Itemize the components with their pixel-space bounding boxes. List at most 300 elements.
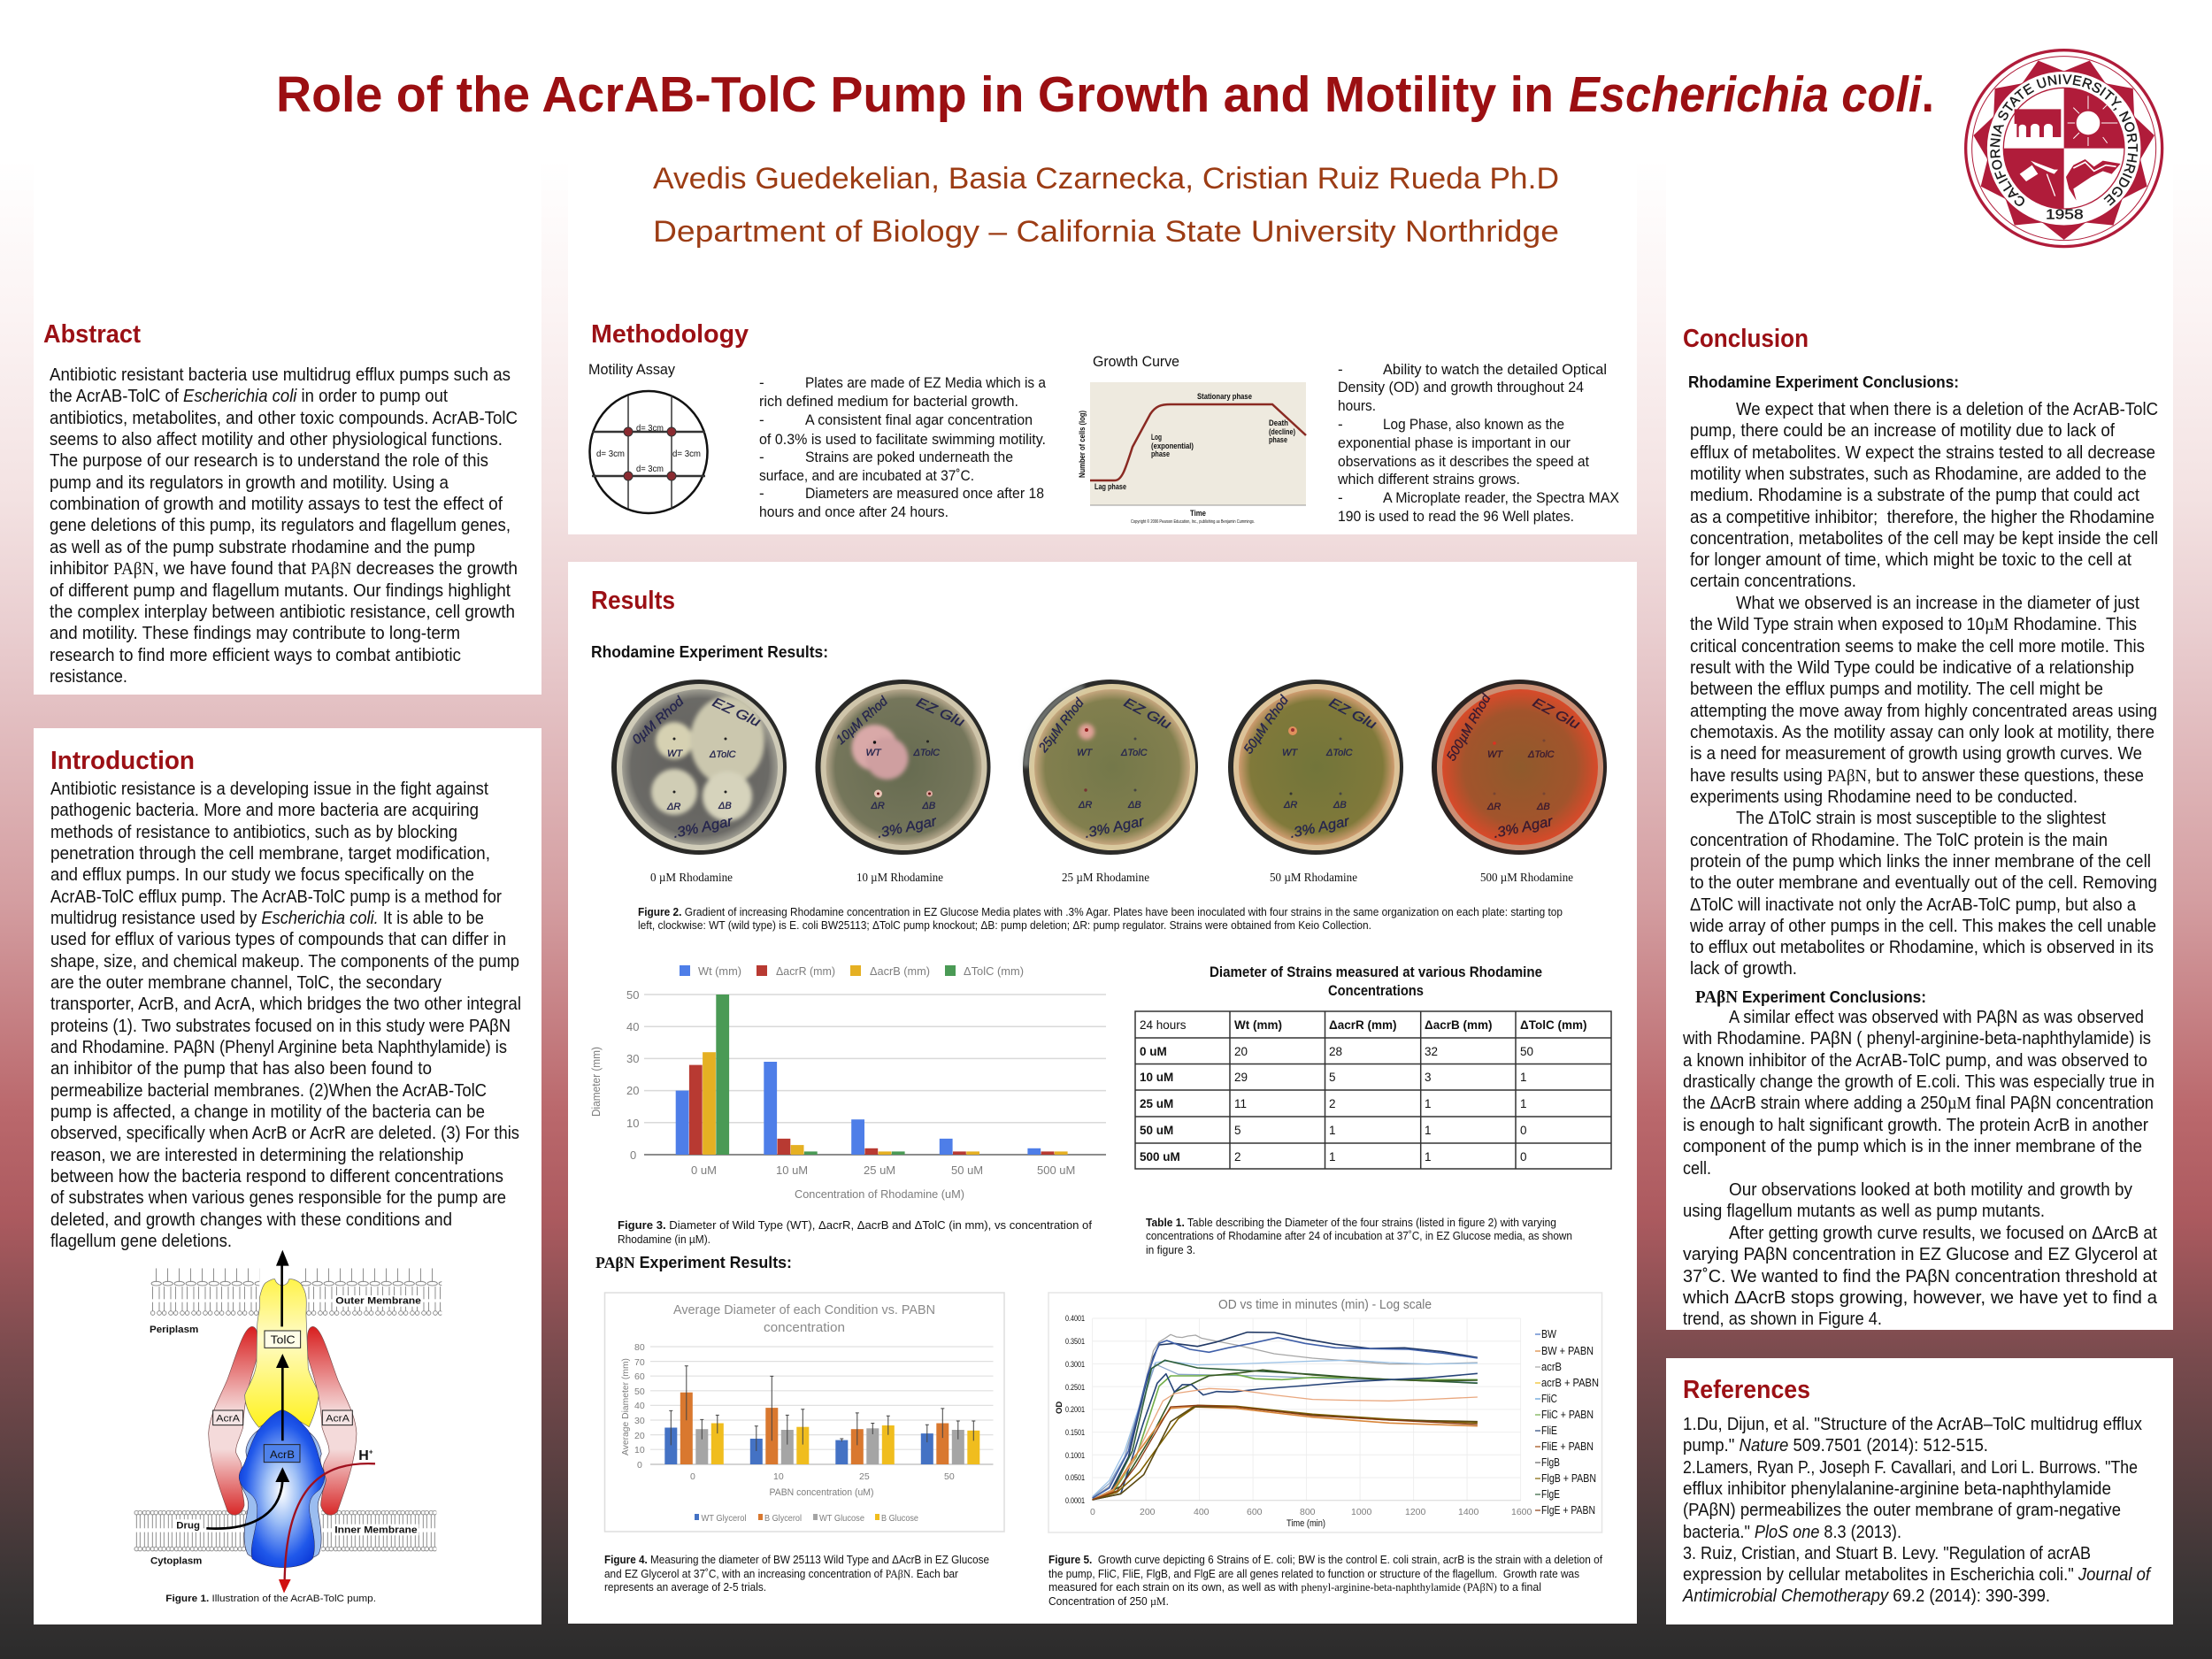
growth curve phases diagram: Log [1151, 433, 1162, 442]
plate: 500 uM rhodamine: EZ Glu [1530, 695, 1583, 733]
figure 3: bar chart of diameter vs rhodamine: 10 [626, 1117, 639, 1130]
label: motility assay: Motility Assay [588, 361, 675, 378]
figure 5: growth curve line chart: 0.0501 [1065, 1473, 1085, 1483]
figure 3: bar chart of diameter vs rhodamine: 25 uM [864, 1164, 895, 1177]
panel: introduction [34, 728, 541, 1624]
subheading: PAβN conclusions: PAβN Experiment Conclusions: [1695, 987, 1926, 1007]
rhodamine conclusions text: The ΔTolC strain is most susceptible to the slightest [1736, 808, 2106, 828]
figure 4: average diameter bar chart: 70 [634, 1357, 645, 1368]
plate: 25 uM rhodamine: ΔR [1078, 800, 1092, 810]
plate: 500 uM rhodamine: WT [1487, 749, 1503, 760]
rhodamine conclusions text: have results using PAβN, but to answer these questions, these [1690, 765, 2144, 786]
subheading: rhodamine conclusions: Rhodamine Experiment Conclusions: [1688, 373, 1959, 391]
PAβN conclusions text: a known inhibitor of the AcrAB-TolC pump, and was observed to [1683, 1050, 2147, 1071]
arrow: efflux out of TolC [279, 1263, 286, 1326]
figure 4: average diameter bar chart [605, 1293, 1004, 1532]
rhodamine conclusions text: medium. Rhodamine is a substrate of the pump that could act [1690, 485, 2139, 505]
growth curves [1093, 1333, 1478, 1500]
box: TolC [265, 1331, 301, 1348]
PAβN conclusions text: cell. [1683, 1158, 1711, 1179]
figure 3: bar chart of diameter vs rhodamine: 50 uM [951, 1164, 983, 1177]
figure 1: AcrAB-TolC pump illustration [134, 1250, 442, 1604]
introduction text: and Rhodamine. PAβN (Phenyl Arginine beta Naphthylamide) is [50, 1037, 507, 1057]
figure 4: average diameter bar chart: 80 [634, 1342, 645, 1353]
abstract text: seems to also affect motility and other physiological functions. [50, 429, 503, 449]
table 1: diameters: 1 [1329, 1124, 1336, 1137]
abstract text: and motility. These findings may contribute to long-term [50, 623, 460, 643]
table 1: diameters: ΔacrR (mm) [1329, 1018, 1396, 1032]
box: AcrB: AcrB [270, 1448, 295, 1461]
legend: FlgE + PABN [1541, 1504, 1595, 1517]
figure 3: bar chart of diameter vs rhodamine: 50 [626, 988, 639, 1002]
text: growth curve methods: Ability to watch the detailed Optical [1383, 361, 1607, 378]
box: AcrA left: AcrA [216, 1414, 241, 1425]
panel: authors and methodology [568, 157, 1637, 534]
text: growth curve methods: 190 is used to read the 96 Well plates. [1338, 508, 1574, 525]
reference list: efflux inhibitor phenylalanine-arginine beta-naphthylamide [1683, 1479, 2111, 1499]
text: growth curve methods: - [1338, 489, 1343, 506]
introduction text: AcrAB-TolC efflux pump. The AcrAB-TolC pump is a method for [50, 887, 502, 907]
rhodamine conclusions text: We expect that when there is a deletion of the AcrAB-TolC [1736, 399, 2158, 419]
subheading: PAβN results: PAβN Experiment Results: [595, 1254, 792, 1271]
abstract text: resistance. [50, 666, 127, 687]
table 1 caption: concentrations of Rhodamine after 24 of incubation at 37˚C, in EZ Glucose media, as shown [1146, 1230, 1572, 1242]
plate: 50 uM rhodamine: 50µM Rhod [1240, 693, 1292, 757]
AcrA left [209, 1326, 257, 1515]
figure 5 caption: Concentration of 250 µM. [1048, 1595, 1169, 1608]
figure 5 caption: Figure 5. Growth curve depicting 6 Strains of E. coli; BW is the control E. coli strain, acrB is the strain with a deletion of [1048, 1554, 1602, 1566]
introduction text: multidrug resistance used by Escherichia coli. It is able to be [50, 908, 484, 928]
heading: results: Results [591, 587, 675, 615]
plate: 25 uM rhodamine [1023, 680, 1198, 855]
figure 5: growth curve line chart: 400 [1194, 1507, 1210, 1517]
plate: 50 uM rhodamine: EZ Glu [1326, 695, 1379, 733]
figure 5: growth curve line chart: 0 [1090, 1507, 1095, 1517]
table 1: diameters: 25 uM [1140, 1097, 1173, 1110]
plate: 0 uM rhodamine: ΔR [666, 802, 680, 812]
figure 2 caption: Figure 2. Gradient of increasing Rhodamine concentration in EZ Glucose Media plates with .3% Agar. Plates have been inoculated with four strains in the same organization on each plate: starting top [638, 906, 1563, 918]
figure 5: growth curve line chart: 0.1501 [1065, 1428, 1085, 1438]
rhodamine conclusions text: between the efflux pumps and motility. The cell might be [1690, 679, 2103, 699]
legend: FliC [1541, 1393, 1557, 1405]
growth curve phases diagram: (decline) [1269, 427, 1295, 437]
rhodamine conclusions text: as a competitive inhibitor; therefore, the higher the Rhodamine [1690, 507, 2154, 527]
abstract text: research to find more efficient ways to combat antibiotic [50, 645, 461, 665]
figure 3 caption [618, 1219, 1093, 1246]
department: Department of Biology – California State University Northridge [653, 215, 1559, 249]
table 1: diameters: 2 [1234, 1150, 1241, 1164]
rhodamine conclusions text: to efflux out metabolites or Rhodamine, which is observed in its [1690, 937, 2154, 957]
plate: 0 uM rhodamine: ΔTolC [709, 749, 736, 760]
figure 3: bar chart of diameter vs rhodamine: 40 [626, 1020, 639, 1033]
introduction text: pump is affected, a change in motility of the bacteria can be [50, 1102, 485, 1122]
arrow: drug uptake [206, 1480, 282, 1529]
reference list: expression by cellular metabolites in Escherichia coli." Journal of [1683, 1564, 2152, 1585]
panel: conclusion [1666, 157, 2173, 1330]
introduction text: permeabilize bacterial membranes. (2)When the AcrAB-TolC [50, 1080, 487, 1101]
figure 3: bar chart of diameter vs rhodamine: 500 uM [1037, 1164, 1075, 1177]
introduction text: deleted, and growth changes with these conditions and [50, 1210, 452, 1230]
legend: FlgE [1541, 1488, 1560, 1501]
figure 3: bar chart of diameter vs rhodamine: 20 [626, 1084, 639, 1097]
introduction text: pathogenic bacteria. More and more bacteria are acquiring [50, 800, 479, 820]
plate: 50 uM rhodamine [1228, 680, 1403, 855]
text: growth curve methods: exponential phase is important in our [1338, 434, 1571, 451]
plate: 500 uM rhodamine: ΔB [1536, 802, 1550, 812]
box: AcrB [264, 1445, 300, 1463]
table 1: diameters: 0 [1520, 1124, 1527, 1137]
rhodamine conclusions text: wide array of other pumps in the cell. This makes the cell unable [1689, 916, 2156, 936]
plate: 50 uM rhodamine: WT [1282, 748, 1298, 758]
figure 3: bar chart of diameter vs rhodamine: 0 uM [691, 1164, 717, 1177]
PAβN conclusions text: with Rhodamine. PAβN ( phenyl-arginine-beta-naphthylamide) is [1682, 1028, 2151, 1048]
plate: 50 uM rhodamine: .3% Agar [1288, 814, 1351, 841]
label: drug: Drug [176, 1520, 200, 1531]
title: Escherichia coli. [1569, 66, 1934, 123]
abstract text: as well as of the pump substrate rhodamine and the pump [50, 537, 475, 557]
growth curve phases diagram [1078, 382, 1306, 525]
abstract text: The purpose of our research is to understand the role of this [50, 450, 488, 471]
table 1: diameters: 28 [1329, 1045, 1342, 1058]
text: motility assay methods: Strains are poked underneath the [805, 449, 1013, 465]
introduction text: Antibiotic resistance is a developing issue in the fight against [50, 779, 488, 799]
plate: 0 uM rhodamine: WT [667, 749, 683, 759]
text: motility assay methods: of 0.3% is used to facilitate swimming motility. [759, 431, 1046, 448]
reference list: (PAβN) permeabilizes the outer membrane of gram-negative [1683, 1500, 2121, 1520]
figure 3 caption: Rhodamine (in µM). [618, 1233, 710, 1246]
figure 5: growth curve line chart: OD vs time in minutes (min) - Log scale [1218, 1297, 1432, 1312]
figure 4: average diameter bar chart: concentration [764, 1320, 845, 1335]
figure 5: growth curve line chart: 0.4001 [1065, 1314, 1085, 1324]
figure 5: growth curve line chart [1048, 1293, 1601, 1532]
abstract text: Antibiotic resistant bacteria use multidrug efflux pumps such as [50, 365, 511, 385]
plate: 10 uM rhodamine: 10µM Rhod [833, 694, 891, 748]
figure 5 caption [1048, 1554, 1602, 1608]
table 1: diameters: 10 uM [1140, 1071, 1173, 1084]
table 1: diameters: 2 [1329, 1097, 1336, 1110]
PAβN conclusions text: 37˚C. We wanted to find the PAβN concentration threshold at [1683, 1266, 2157, 1286]
table 1: diameters: 29 [1234, 1071, 1248, 1084]
logo: CSUN seal: 1958 [2046, 207, 2084, 222]
plate: 25 uM rhodamine: WT [1077, 748, 1093, 758]
text: growth curve methods: A Microplate reader, the Spectra MAX [1383, 489, 1619, 506]
plate: 10 uM rhodamine: WT [865, 748, 882, 758]
motility plate diagram: d= 3cm [672, 449, 701, 459]
reference list: 3. Ruiz, Cristian, and Stuart B. Levy. "Regulation of acrAB [1683, 1543, 2091, 1563]
logo: CSUN seal [1964, 49, 2164, 248]
table 1: diameters: 50 uM [1140, 1124, 1173, 1137]
table 1 caption: in figure 3. [1146, 1244, 1195, 1256]
AcrA right [307, 1326, 357, 1515]
table title: Concentrations [1328, 983, 1424, 999]
rhodamine conclusions text: motility when substrates, such as Rhodamine, are added to the [1690, 464, 2147, 484]
figure 5: growth curve line chart: 1000 [1351, 1507, 1372, 1517]
panel: abstract [34, 157, 541, 695]
panel: references [1666, 1358, 2173, 1624]
figure 5: growth curve line chart: 0.3001 [1065, 1360, 1085, 1370]
plate: 10 uM rhodamine: .3% Agar [876, 814, 939, 841]
introduction text [50, 779, 521, 1251]
table 1: diameters: 1 [1425, 1124, 1432, 1137]
figure 4 caption: represents an average of 2-5 trials. [604, 1581, 766, 1594]
box: AcrA left [213, 1410, 243, 1425]
table 1: diameters: 5 [1234, 1124, 1241, 1137]
authors: Avedis Guedekelian, Basia Czarnecka, Cristian Ruiz Rueda Ph.D [653, 162, 1559, 196]
table 1: diameters: 1 [1425, 1150, 1432, 1164]
introduction text: transporter, AcrB, and AcrA, which bridges the two other integral [50, 994, 521, 1014]
rhodamine conclusions text: the Wild Type strain when exposed to 10µM Rhodamine. This [1690, 614, 2137, 634]
figure 3: bar chart of diameter vs rhodamine: Diameter (mm) [589, 1047, 603, 1117]
text: motility assay methods: surface, and are incubated at 37˚C. [759, 467, 974, 484]
plate: 10 uM rhodamine: ΔB [922, 801, 935, 811]
rhodamine conclusions text: pump, there could be an increase of motility due to lack of [1690, 420, 2115, 441]
table 1: diameters: 0 uM [1140, 1045, 1167, 1058]
abstract text [50, 365, 518, 687]
text: motility assay methods [759, 374, 1046, 520]
figure 5: growth curve line chart: 0.0001 [1065, 1496, 1085, 1506]
plate: 10 uM rhodamine: ΔR [871, 801, 885, 811]
table 1: diameters: 500 uM [1140, 1150, 1180, 1164]
label: proton: + [369, 1448, 373, 1455]
plate: 50 uM rhodamine: ΔB [1333, 800, 1347, 810]
rhodamine conclusions text: is a need for measurement of growth using growth curves. We [1690, 743, 2142, 764]
text: motility assay methods: - [759, 449, 764, 465]
rhodamine conclusions text: concentration of Rhodamine. The TolC protein is the main [1690, 830, 2108, 850]
text: growth curve methods: - [1338, 416, 1343, 433]
title: Role of the AcrAB-TolC Pump in Growth and Motility in [276, 66, 1554, 123]
rhodamine conclusions text: critical concentration seems to make the cell more motile. This [1690, 636, 2145, 657]
box: TolC: TolC [271, 1334, 296, 1347]
rhodamine conclusions text: to the outer membrane and eventually out of the cell. Removing [1690, 872, 2157, 893]
figure 3: bar chart of diameter vs rhodamine: 30 [626, 1052, 639, 1065]
plate: 25 uM rhodamine: ΔB [1127, 800, 1141, 810]
figure 5: growth curve line chart: 0.2501 [1065, 1383, 1085, 1393]
plate: 0 uM rhodamine: .3% Agar [672, 814, 734, 841]
abstract text: of different pump and flagellum mutants. Our findings highlight [50, 580, 511, 601]
plate: 0 uM rhodamine: ΔB [718, 801, 732, 811]
table title [1210, 964, 1542, 999]
figure 5: growth curve line chart: 0.1001 [1065, 1451, 1085, 1461]
PAβN conclusions text [1682, 1007, 2158, 1329]
figure 4: average diameter bar chart: 0 [637, 1460, 642, 1471]
figure 4: average diameter bar chart: 50 [944, 1471, 955, 1482]
figure 4: average diameter bar chart: 60 [634, 1371, 645, 1382]
legend: WT Glucose [819, 1513, 864, 1524]
figure 5: growth curve line chart: 600 [1247, 1507, 1263, 1517]
text: motility assay methods: A consistent final agar concentration [805, 411, 1033, 428]
plate: 500 uM rhodamine [1432, 680, 1607, 855]
figure 5: growth curve line chart: 0.3501 [1065, 1337, 1085, 1347]
PAβN conclusions text: which ΔAcrB stops growing, however, we have yet to find a [1682, 1287, 2158, 1308]
text: motility assay methods: hours and once after 24 hours. [759, 503, 949, 520]
plate labels: 25 µM Rhodamine [1062, 872, 1149, 885]
figure 5: growth curve line chart: 800 [1300, 1507, 1316, 1517]
introduction text: an inhibitor of the pump that has also been found to [50, 1058, 432, 1079]
legend: B Glucose [881, 1513, 918, 1524]
rhodamine conclusions text: attempting the move away from highly concentrated areas using [1690, 701, 2157, 721]
abstract text: pump and its regulators in growth and motility. Using a [50, 472, 449, 493]
introduction text: of substrates when various genes responsible for the pump are [50, 1187, 506, 1208]
figure 4: average diameter bar chart: PABN concentration (uM) [770, 1487, 874, 1498]
table 1: diameters: 1 [1520, 1097, 1527, 1110]
legend: ΔacrR (mm) [776, 964, 835, 978]
rhodamine conclusions text: What we observed is an increase in the diameter of just [1736, 593, 2139, 613]
heading: introduction: Introduction [50, 747, 195, 775]
legend: acrB + PABN [1541, 1377, 1599, 1389]
figure 4 caption: Figure 4. Measuring the diameter of BW 25113 Wild Type and ΔAcrB in EZ Glucose [604, 1554, 989, 1566]
introduction text: observed, specifically when AcrB or AcrR are deleted. (3) For this [50, 1123, 519, 1143]
PAβN conclusions text: the ΔAcrB strain where adding a 250µM final PAβN concentration [1683, 1093, 2154, 1113]
text: motility assay methods: - [759, 411, 764, 428]
figure 2 caption [638, 906, 1563, 932]
figure 4 caption [604, 1554, 989, 1594]
figure 4 caption: and EZ Glycerol at 37˚C, with an increasing concentration of PAβN. Each bar [604, 1568, 958, 1580]
table 1: diameters: 3 [1425, 1071, 1432, 1084]
plate: 0 uM rhodamine [611, 680, 787, 855]
plate: 0 uM rhodamine: 0µM Rhod [629, 694, 687, 748]
growth curve phases diagram: Copyright © 2006 Pearson Education, Inc., publishing as Benjamin Cummings. [1131, 518, 1255, 525]
reference list: 1.Du, Dijun, et al. "Structure of the AcrAB–TolC multidrug efflux [1683, 1414, 2143, 1434]
plate labels: 10 µM Rhodamine [856, 872, 943, 885]
table 1: diameters: 32 [1425, 1045, 1438, 1058]
growth curve phases diagram: phase [1151, 449, 1170, 459]
reference list [1681, 1414, 2152, 1606]
figure 5 caption: measured for each strain on its own, as well as with phenyl-arginine-beta-naphthylamide (PAβN) to a final [1048, 1581, 1541, 1594]
figure 5: growth curve line chart: 1200 [1405, 1507, 1426, 1517]
PAβN conclusions text: A similar effect was observed with PAβN as was observed [1729, 1007, 2144, 1027]
label: proton: H [358, 1448, 369, 1463]
growth curve phases diagram: Number of cells (log) [1078, 411, 1087, 478]
rhodamine conclusions text: result with the Wild Type could be indicative of a relationship [1690, 657, 2134, 678]
legend: BW [1541, 1328, 1556, 1340]
plate: 0 uM rhodamine: EZ Glu [710, 695, 764, 730]
legend [680, 964, 1024, 978]
plate: 25 uM rhodamine: ΔTolC [1120, 748, 1148, 758]
logo: CSUN seal: CALIFORNIA STATE UNIVERSITY, NORTHRIDGE [1990, 74, 2138, 206]
plate: 500 uM rhodamine: 500µM Rhod [1444, 691, 1494, 764]
heading: methodology: Methodology [591, 320, 749, 349]
abstract text: the complex interplay between antibiotic resistance, cell growth [50, 602, 515, 622]
reference list: Antimicrobial Chemotherapy 69.2 (2014): 390-399. [1681, 1586, 2050, 1606]
introduction text: and efflux pumps. In our study we focus specifically on the [50, 864, 474, 885]
text: motility assay methods: - [759, 374, 764, 391]
abstract text: gene deletions of this pump, its regulators and flagellum genes, [50, 515, 511, 535]
reference list: 2.Lamers, Ryan P., Joseph F. Cavallari, and Lori L. Burrows. "The [1683, 1457, 2138, 1478]
rhodamine conclusions text: lack of growth. [1690, 958, 1797, 979]
motility plate diagram: d= 3cm [596, 449, 625, 459]
legend: FliC + PABN [1541, 1409, 1594, 1421]
plate labels: 500 µM Rhodamine [1480, 872, 1573, 885]
label: cytoplasm: Cytoplasm [150, 1556, 202, 1567]
legend: B Glycerol [764, 1513, 802, 1524]
figure 4: average diameter bar chart: 40 [634, 1401, 645, 1411]
figure 4: average diameter bar chart: Average Diameter (mm) [620, 1358, 631, 1455]
rhodamine conclusions text: ΔTolC will inactivate not only the AcrAB-TolC pump, but also a [1690, 895, 2137, 915]
motility plate diagram [589, 391, 708, 513]
PAβN conclusions text: varying PAβN concentration in EZ Glucose and EZ Glycerol at [1683, 1244, 2157, 1264]
plate: 25 uM rhodamine: EZ Glu [1121, 695, 1174, 733]
table 1: diameters: 24 hours [1140, 1018, 1187, 1032]
figure 4: average diameter bar chart: 0 [690, 1471, 695, 1482]
introduction text: are the outer membrane channel, TolC, the secondary [50, 972, 442, 993]
rhodamine conclusions text: protein of the pump which links the inner membrane of the cell [1690, 851, 2151, 872]
abstract text: inhibitor PAβN, we have found that PAβN decreases the growth [50, 558, 518, 579]
legend: acrB [1541, 1361, 1562, 1373]
text: growth curve methods: observations as it describes the speed at [1338, 453, 1589, 470]
legend: ΔacrB (mm) [870, 964, 930, 978]
abstract text: combination of growth and motility assays to test the effect of [50, 494, 503, 514]
text: motility assay methods: rich defined medium for bacterial growth. [759, 393, 1018, 410]
TolC protein [245, 1279, 319, 1427]
growth curve phases diagram: Lag phase [1094, 482, 1126, 492]
table 1: diameters: 11 [1234, 1097, 1247, 1110]
PAβN conclusions text: Our observations looked at both motility and growth by [1729, 1179, 2133, 1200]
figure 5: growth curve line chart: 200 [1140, 1507, 1156, 1517]
figure 3: bar chart of diameter vs rhodamine [589, 964, 1106, 1201]
rhodamine conclusions text: efflux of metabolites. W expect the strains tested to all decrease [1690, 442, 2155, 463]
panel: results [568, 562, 1637, 1624]
figure 4: average diameter bar chart: 50 [634, 1386, 645, 1397]
figure 4: average diameter bar chart: 10 [634, 1445, 645, 1455]
legend: ΔTolC (mm) [964, 964, 1024, 978]
figure 4: average diameter bar chart: 25 [859, 1471, 870, 1482]
table 1: diameters: 1 [1329, 1150, 1336, 1164]
plate: 500 uM rhodamine: ΔTolC [1527, 749, 1555, 760]
rhodamine conclusions text: chemotaxis. As the motility assay can only look at motility, there [1690, 722, 2154, 742]
rhodamine conclusions text: concentration, metabolites of the cell may be kept inside the cell [1690, 528, 2158, 549]
reference list: pump." Nature 509.7501 (2014): 512-515. [1683, 1435, 1988, 1455]
growth curve phases diagram: Time [1190, 509, 1206, 518]
text: motility assay methods: Plates are made of EZ Media which is a [805, 374, 1046, 391]
heading: abstract: Abstract [43, 320, 141, 349]
plate: 50 uM rhodamine: ΔR [1283, 800, 1297, 810]
legend: FliE [1541, 1425, 1557, 1437]
heading: references: References [1683, 1376, 1810, 1404]
table 1: diameters: Wt (mm) [1234, 1018, 1282, 1032]
plate: 500 uM rhodamine: .3% Agar [1492, 814, 1555, 841]
abstract text: antibiotics, metabolites, and other toxic compounds. AcrAB-TolC [50, 408, 518, 428]
arrow: efflux through AcrB [279, 1367, 286, 1440]
label: inner membrane: Inner Membrane [334, 1525, 418, 1536]
plate: 50 uM rhodamine: ΔTolC [1325, 748, 1353, 758]
text: motility assay methods: - [759, 485, 764, 502]
text: growth curve methods: hours. [1338, 397, 1376, 414]
figure 3: bar chart of diameter vs rhodamine: 10 uM [776, 1164, 808, 1177]
figure 4: average diameter bar chart: 20 [634, 1431, 645, 1441]
PAβN conclusions text: is enough to halt significant growth. The protein AcrB in another [1683, 1115, 2148, 1135]
legend: FlgB [1541, 1456, 1560, 1469]
plate: 10 uM rhodamine: EZ Glu [914, 695, 967, 730]
growth curve phases diagram: Death [1269, 419, 1288, 428]
legend: WT Glycerol [701, 1513, 747, 1524]
figure 2 caption: left, clockwise: WT (wild type) is E. coli BW25113; ΔTolC pump knockout; ΔB: pump deletion; ΔR: pump regulator. Strains were obtained from Keio Collection. [638, 919, 1371, 932]
motility plate diagram: d= 3cm [636, 423, 664, 434]
figure 5: growth curve line chart: 0.2001 [1065, 1405, 1085, 1415]
table 1: diameters: ΔacrB (mm) [1425, 1018, 1492, 1032]
plate labels: 0 µM Rhodamine [650, 872, 733, 885]
table 1: diameters: 1 [1520, 1071, 1527, 1084]
PAβN conclusions text: component of the pump which is in the inner membrane of the [1683, 1136, 2142, 1156]
table 1: diameters [1135, 1011, 1611, 1169]
legend [1535, 1328, 1599, 1517]
introduction text: reason, we are interested in determining the relationship [50, 1145, 464, 1165]
figure 5: growth curve line chart: 1400 [1458, 1507, 1479, 1517]
figure 4: average diameter bar chart: 30 [634, 1416, 645, 1426]
legend [695, 1513, 918, 1524]
abstract text: the AcrAB-TolC of Escherichia coli in order to pump out [50, 386, 448, 406]
table 1: diameters: 0 [1520, 1150, 1527, 1164]
label: outer membrane: Outer Membrane [335, 1296, 421, 1307]
